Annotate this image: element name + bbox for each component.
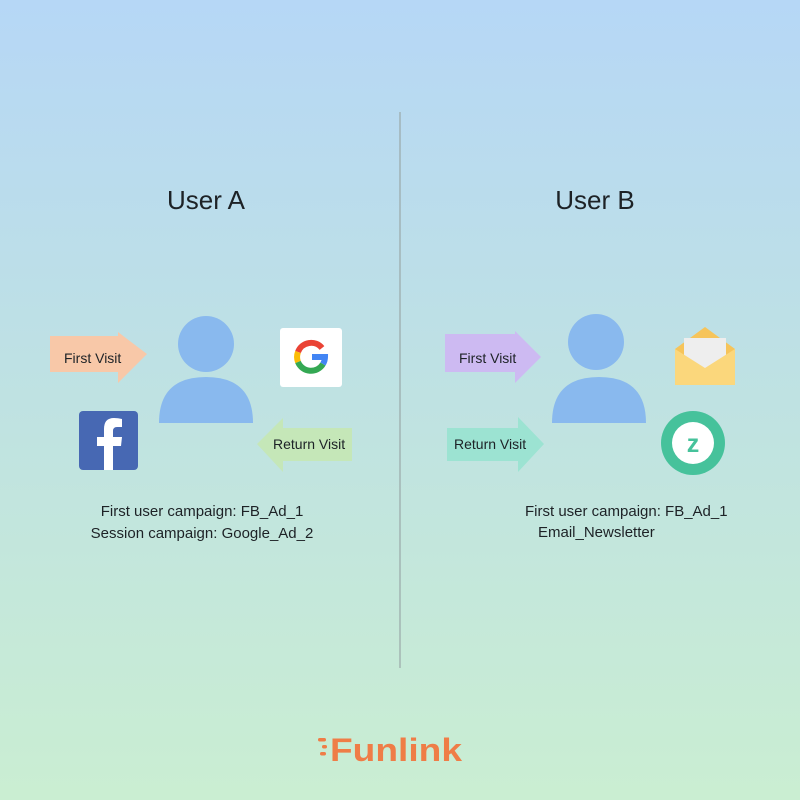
icon: google — [280, 328, 342, 387]
arrow: first visit B — [445, 331, 541, 383]
icon: z circle — [661, 411, 725, 475]
arrow: first visit A — [50, 332, 147, 383]
icon: facebook — [79, 411, 138, 470]
title: User B: User B — [555, 185, 635, 215]
icon: envelope — [675, 327, 735, 385]
text: user B campaigns: Email_Newsletter — [538, 524, 655, 541]
title: User A: User A — [167, 185, 246, 215]
text: user A campaigns — [91, 503, 313, 542]
logo: Funlink: Funlink — [330, 732, 462, 768]
arrow: first visit A: First Visit — [64, 350, 121, 366]
text: user B campaigns: First user campaign: FB_Ad_1 — [525, 503, 728, 520]
arrow: return visit B: Return Visit — [454, 436, 526, 452]
arrow: return visit A: Return Visit — [273, 436, 345, 452]
arrow: return visit A — [257, 418, 352, 472]
text: user B campaigns — [525, 503, 728, 541]
text: user A campaigns: Session campaign: Google_Ad_2 — [91, 525, 313, 542]
icon: user A person — [159, 316, 253, 423]
arrow: first visit B: First Visit — [459, 350, 516, 366]
icon: user B person — [552, 314, 646, 423]
arrow: return visit B — [447, 417, 544, 472]
icon: z circle: z — [687, 430, 699, 458]
text: user A campaigns: First user campaign: FB_Ad_1 — [101, 503, 303, 520]
